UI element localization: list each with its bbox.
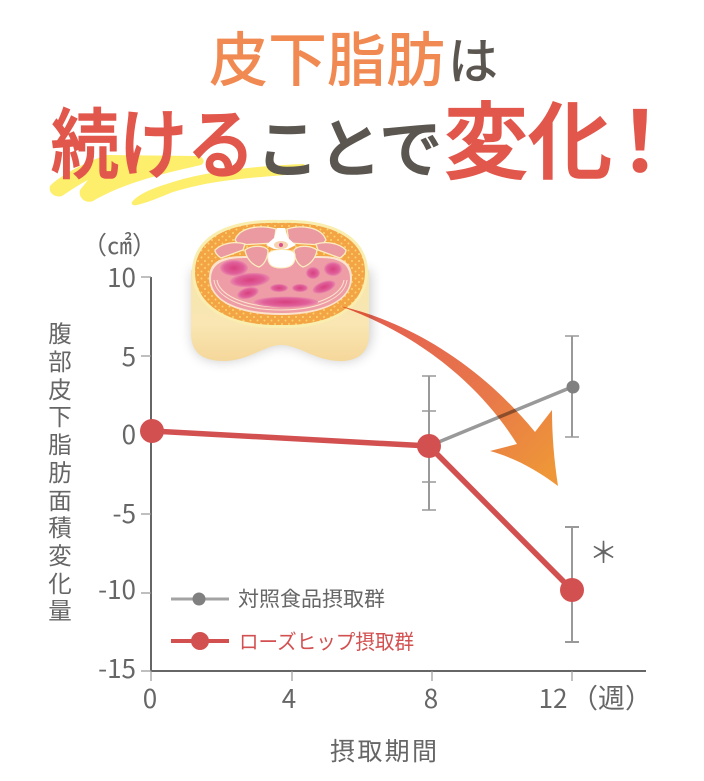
x axis tick labels: 12 [539,679,567,716]
x axis title: 摂取期間 [330,732,437,768]
y axis title: 量 [48,592,72,626]
y axis title: 変 [48,537,72,571]
y axis tick labels: 0 [122,415,136,452]
legend [171,582,414,655]
y axis title: 肪 [48,454,72,488]
body shadow [192,270,371,361]
y axis tick labels: 5 [122,337,136,374]
organs [220,260,248,276]
y axis title: 皮 [48,371,72,405]
y axis title: 化 [48,565,72,599]
title: second line: ことで [256,99,442,191]
x axis tick labels: （週） [571,677,652,716]
title: second line: 変化 [444,76,612,197]
y axis title: 腹 [48,315,72,349]
subcutaneous fat [195,223,365,325]
y axis title: 脂 [48,426,72,460]
y axis title: 部 [48,343,72,377]
title: top line: は [448,22,498,94]
illustration: abdominal cross-section [191,220,371,361]
arrow: downward change [340,306,558,486]
lower body [191,270,369,361]
back muscles and spine [235,227,326,245]
y axis title: 下 [48,398,72,432]
yellow highlight brush [50,155,306,205]
legend: ローズヒップ摂取群 [239,625,414,655]
x axis tick labels: 4 [282,679,296,716]
y axis tick labels: -5 [113,494,136,531]
y axis title [48,315,72,626]
abdominal cavity [209,256,352,315]
legend: 対照食品摂取群 [238,582,385,612]
x axis tick labels: 0 [143,679,157,716]
rose hip line [140,419,584,602]
y axis title: 積 [48,509,72,543]
control group line with error bars [422,336,580,510]
title: second line: 続ける [51,84,255,194]
x axis [151,671,646,681]
y axis [141,277,151,671]
x axis tick labels: 8 [424,679,438,716]
rose hip error bars [565,527,579,642]
title: second line [51,76,682,197]
y axis tick labels [98,258,136,686]
title: second line: ！ [598,76,682,197]
significance asterisk: ＊ [589,530,618,572]
x axis tick labels [143,677,652,716]
y axis tick labels: 10 [107,258,136,295]
skin outline [192,220,368,328]
y axis tick labels: -10 [98,570,136,607]
y axis tick labels: -15 [98,649,136,686]
y axis title: 面 [48,482,72,516]
title: top line: 皮下脂肪 [209,13,445,98]
unit label: （㎠） [82,226,157,262]
